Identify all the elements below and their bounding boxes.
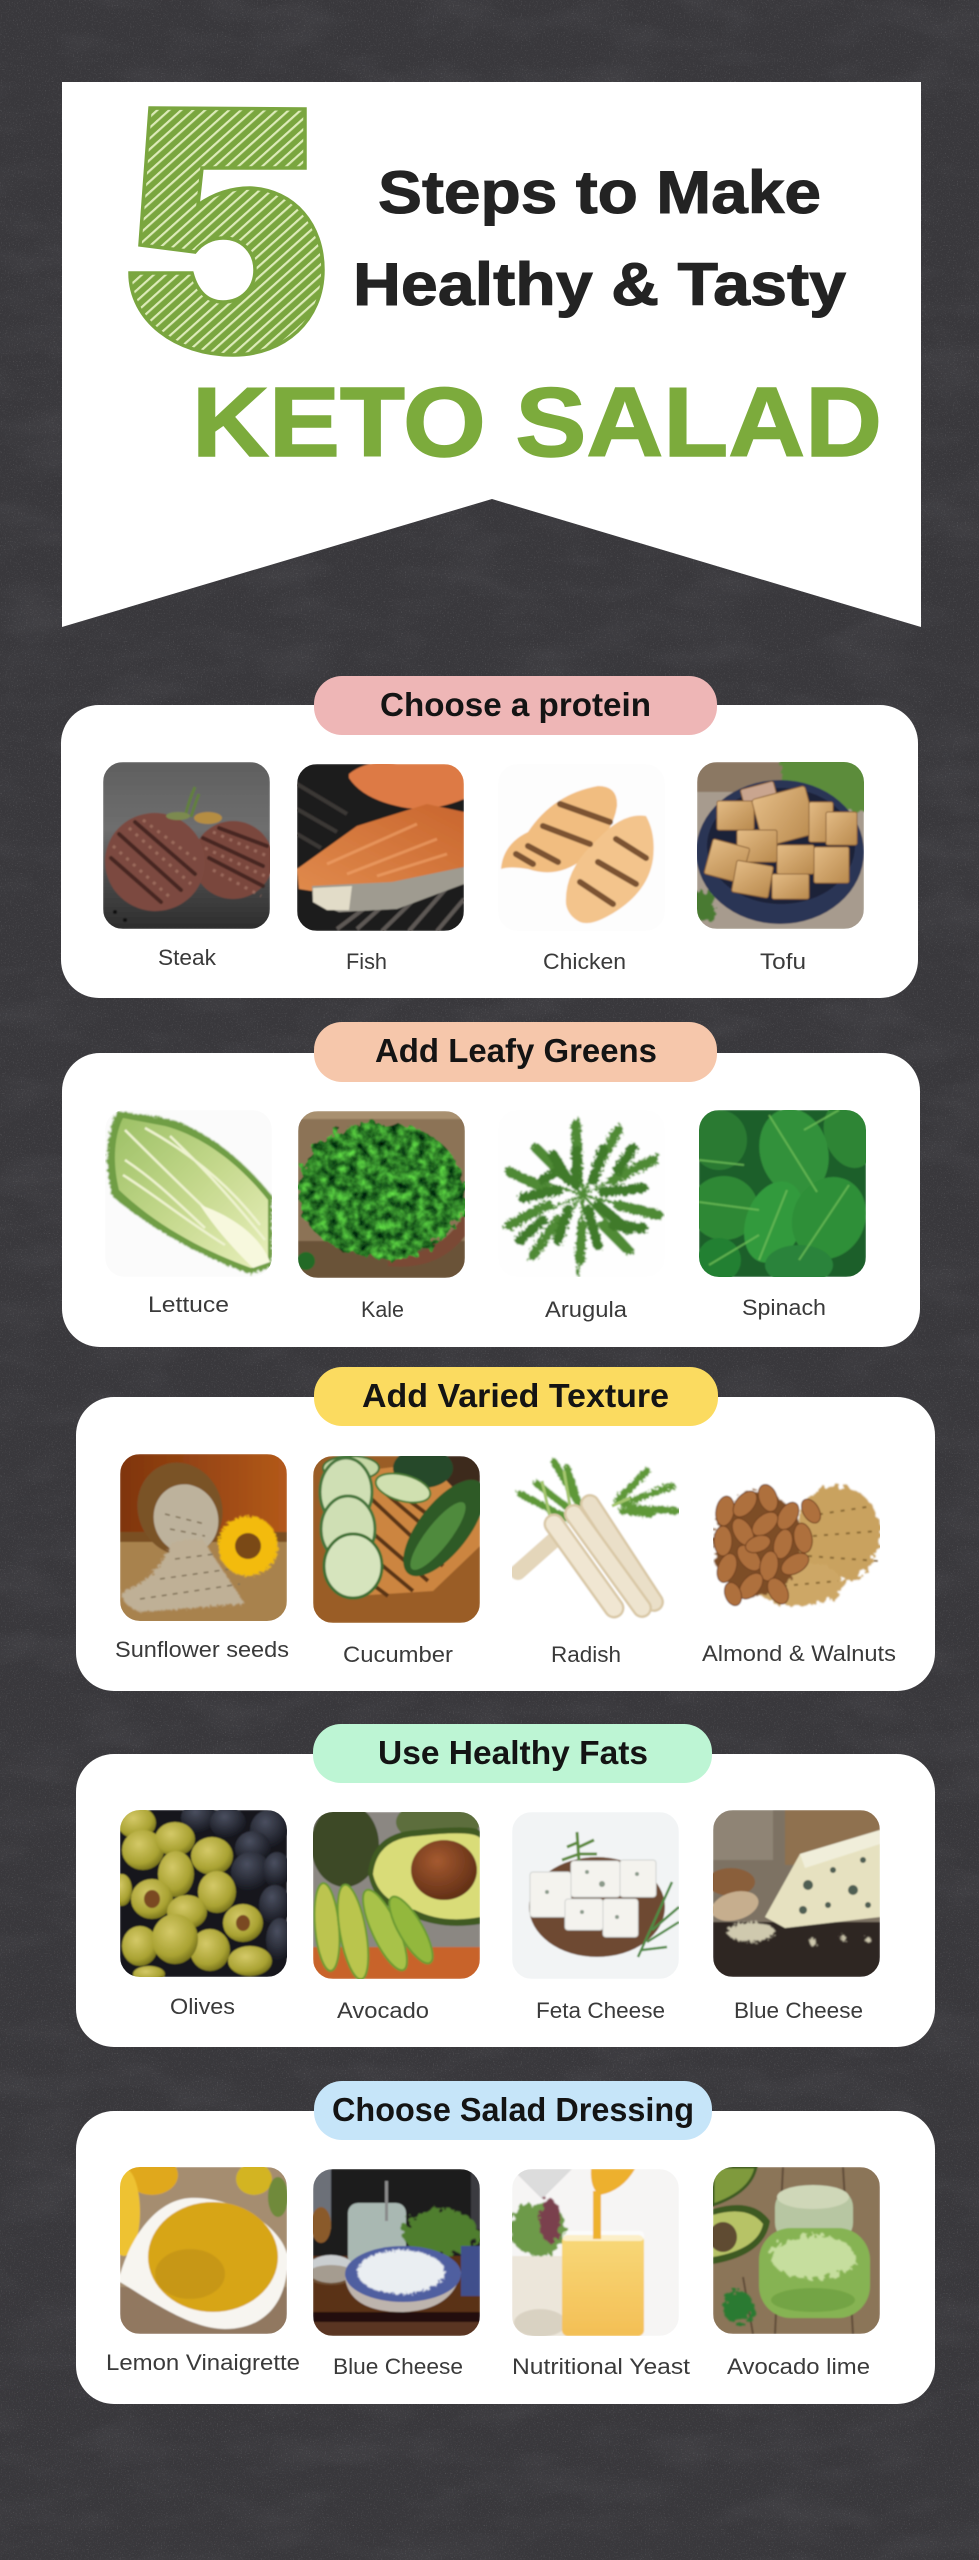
title banner — [62, 82, 921, 627]
image: steak — [94, 762, 273, 929]
label: Blue Cheese: Blue Cheese — [333, 2354, 463, 2379]
label: Olives: Olives — [170, 1994, 235, 2019]
heading pill: add leafy greens — [314, 1022, 717, 1082]
label: Almond & Walnuts: Almond & Walnuts — [702, 1641, 896, 1666]
image: almonds and walnuts — [713, 1482, 880, 1608]
image: olives — [120, 1810, 287, 1977]
heading pill: use healthy fats: Use Healthy Fats — [378, 1734, 648, 1771]
image: cucumber — [313, 1456, 480, 1623]
image: blue cheese dressing — [307, 2169, 480, 2336]
heading pill: add varied texture: Add Varied Texture — [362, 1377, 669, 1414]
label: Avocado lime: Avocado lime — [727, 2354, 870, 2379]
label: Arugula: Arugula — [545, 1297, 628, 1322]
heading pill: add leafy greens: Add Leafy Greens — [375, 1032, 657, 1069]
image: avocado lime dressing — [709, 2167, 880, 2334]
image: feta cheese — [512, 1812, 679, 1979]
label: Feta Cheese: Feta Cheese — [536, 1998, 665, 2023]
image: spinach — [699, 1110, 866, 1277]
image: nutritional yeast dressing — [510, 2169, 679, 2337]
image: tofu — [692, 757, 872, 929]
image: chicken — [500, 785, 655, 924]
image: radish — [512, 1456, 679, 1623]
title: keto salad: KETO SALAD — [192, 367, 882, 477]
panel: add varied texture — [76, 1367, 935, 1691]
label: Sunflower seeds: Sunflower seeds — [115, 1637, 289, 1662]
title line 2: Healthy & Tasty — [353, 251, 847, 318]
image: sunflower seeds — [120, 1450, 287, 1622]
label: Steak: Steak — [158, 945, 217, 970]
label: Spinach: Spinach — [742, 1295, 826, 1320]
label: Lemon Vinaigrette: Lemon Vinaigrette — [106, 2350, 300, 2375]
heading pill: choose a protein: Choose a protein — [380, 686, 651, 723]
panel: choose a protein — [61, 676, 918, 998]
heading pill: use healthy fats — [313, 1724, 712, 1783]
label: Nutritional Yeast: Nutritional Yeast — [512, 2354, 690, 2379]
panel: use healthy fats — [76, 1724, 935, 2047]
label: Avocado: Avocado — [337, 1998, 429, 2023]
image: lettuce — [105, 1110, 272, 1277]
image: avocado — [311, 1800, 480, 1982]
label: Tofu: Tofu — [760, 949, 806, 974]
label: Chicken: Chicken — [543, 949, 626, 974]
heading pill: choose salad dressing: Choose Salad Dressing — [332, 2091, 694, 2128]
heading pill: add varied texture — [314, 1367, 718, 1426]
image: kale — [297, 1111, 465, 1278]
heading pill: choose a protein — [314, 676, 717, 735]
label: Fish: Fish — [346, 949, 387, 974]
heading pill: choose salad dressing — [314, 2081, 712, 2140]
panel: add leafy greens — [62, 1022, 920, 1347]
image: arugula — [498, 1110, 665, 1277]
image: lemon vinaigrette — [120, 2167, 287, 2334]
label: Radish: Radish — [551, 1642, 621, 1667]
label: Kale: Kale — [361, 1297, 404, 1322]
panel: choose salad dressing — [76, 2081, 935, 2404]
label: Lettuce: Lettuce — [148, 1292, 229, 1317]
title line 1: Steps to Make — [378, 159, 821, 226]
image: fish — [297, 763, 464, 931]
icon: hatched number 5 — [130, 108, 323, 355]
image: blue cheese — [707, 1810, 880, 1977]
label: Cucumber: Cucumber — [343, 1642, 453, 1667]
label: Blue Cheese: Blue Cheese — [734, 1998, 863, 2023]
